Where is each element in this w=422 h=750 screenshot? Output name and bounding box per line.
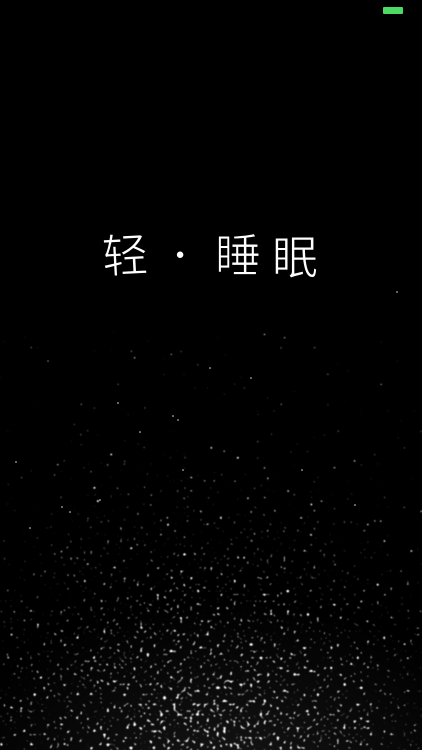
title: 轻·睡眠 [101,229,318,284]
title: 轻·睡眠: 轻 [101,229,149,283]
title: 轻·睡眠: 眠 [272,232,318,284]
title: 轻·睡眠: 睡 [215,230,261,282]
title: 轻·睡眠: ● [175,246,185,263]
status indicator: green battery [383,7,403,14]
star field [0,292,422,750]
